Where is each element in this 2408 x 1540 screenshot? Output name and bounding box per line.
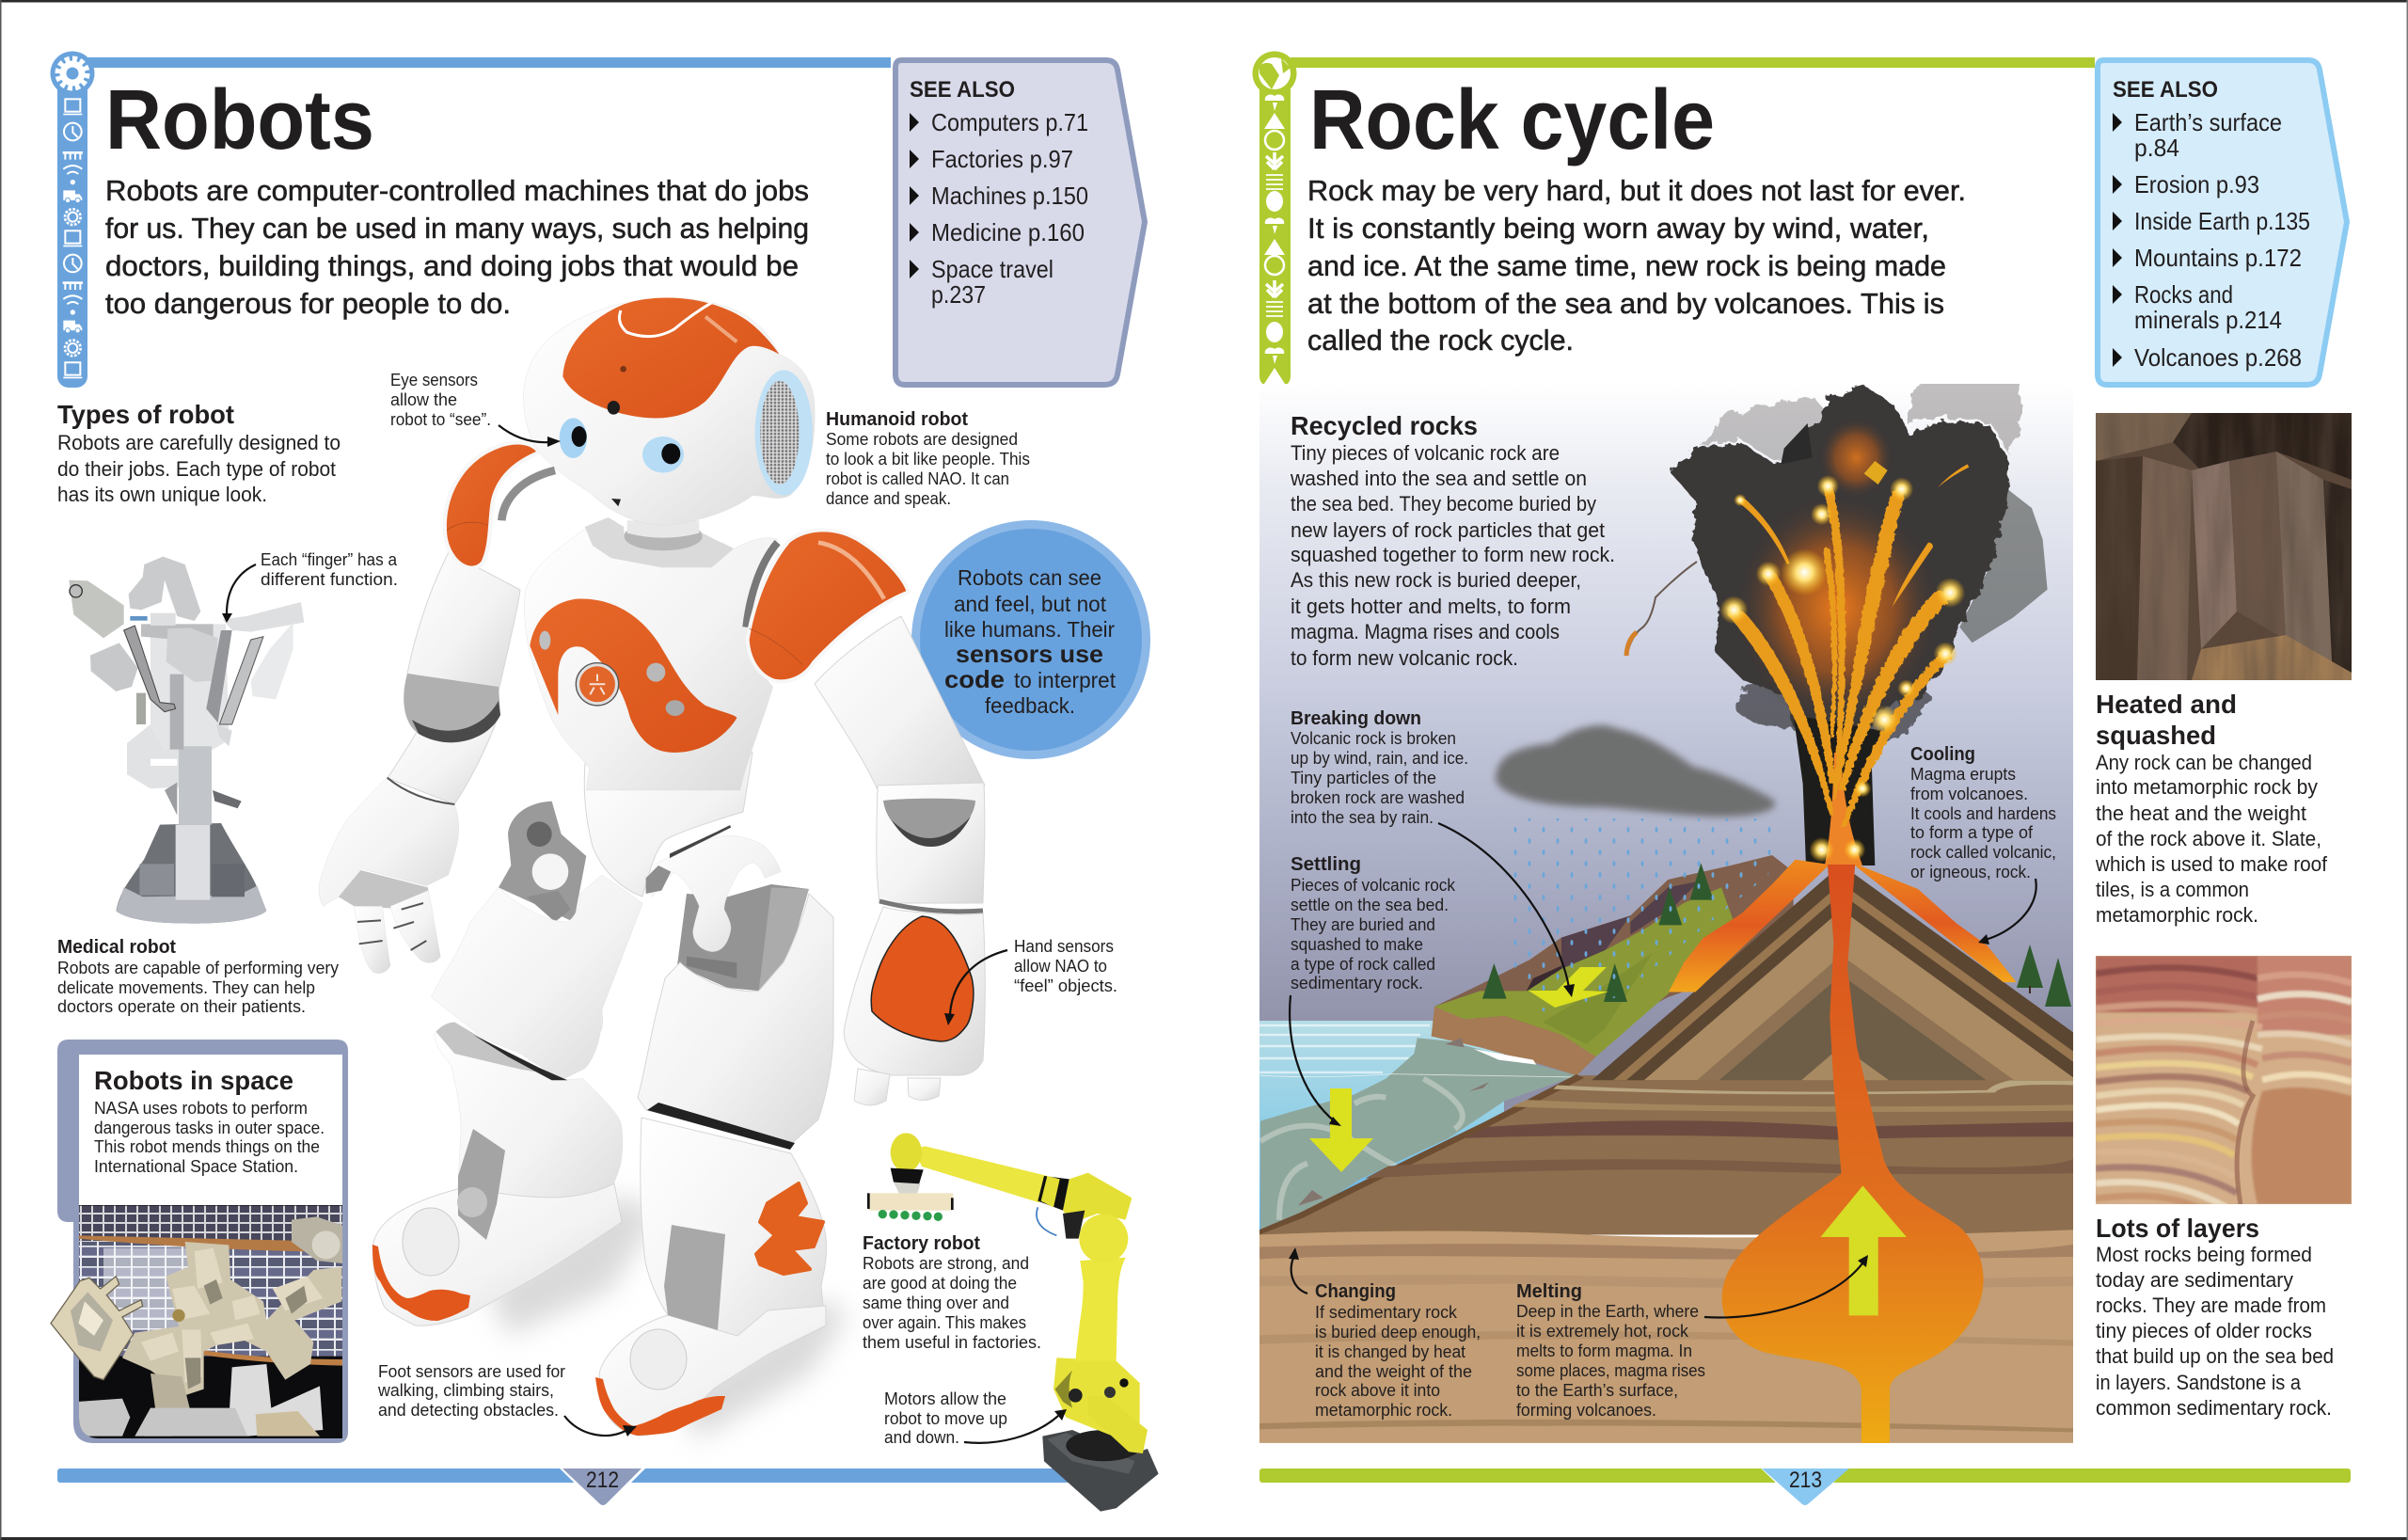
head — [524, 298, 815, 525]
right hip arch — [646, 835, 781, 952]
text: lots of layers: tiny pieces of older rocks — [2096, 1319, 2312, 1342]
text: recycled rocks — [1290, 411, 1615, 670]
text: melting: forming volcanoes. — [1516, 1400, 1656, 1420]
collar and neck — [585, 517, 734, 567]
text: recycled rocks: washed into the sea and settle on — [1290, 467, 1587, 490]
header bar — [1291, 57, 2095, 68]
arrow: finger — [222, 564, 256, 623]
text: recycled rocks: magma. Magma rises and cools — [1291, 620, 1560, 643]
icon sidebar — [1253, 51, 1296, 388]
sediment layers — [1259, 1075, 2073, 1234]
text: types of robot: Types of robot — [57, 400, 234, 429]
right thigh — [638, 894, 833, 1145]
panel: robots in space: dangerous tasks in outer space. — [94, 1118, 325, 1137]
floor shadow — [489, 1195, 847, 1439]
text: humanoid robot: Some robots are designed — [826, 429, 1018, 449]
text: lots of layers: that build up on the sea bed — [2096, 1344, 2334, 1368]
right shoulder — [746, 543, 778, 627]
arrow: hand sensors — [944, 950, 1007, 1025]
text: recycled rocks: it gets hotter and melts, to form — [1291, 595, 1571, 618]
text: factory robot: same thing over and — [863, 1293, 1009, 1312]
arrow: settling down yellow — [1309, 1088, 1373, 1172]
label: each finger — [261, 549, 398, 589]
panel: see also: Medicine p.160 — [931, 218, 1085, 246]
text: settling: Settling — [1291, 854, 1361, 875]
text: lots of layers: common sedimentary rock. — [2096, 1396, 2332, 1420]
text: lots of layers: rocks. They are made from — [2096, 1294, 2326, 1317]
panel: see also: minerals p.214 — [2134, 306, 2282, 334]
title: Rock cycle — [1309, 73, 1715, 167]
panel: robots in space: This robot mends things on the — [94, 1136, 320, 1156]
panel: see also: Inside Earth p.135 — [2134, 207, 2310, 235]
intro text: too dangerous for people to do. — [105, 287, 511, 320]
arrow: eye sensors — [499, 425, 561, 447]
label: motors — [884, 1389, 1007, 1447]
text: heated and squashed: into metamorphic rock by — [2096, 775, 2319, 799]
intro text: doctors, building things, and doing jobs that would be — [105, 249, 799, 282]
intro text — [1307, 174, 1966, 357]
robot left arm — [319, 552, 520, 974]
callout: robots can see and feel: sensors use — [956, 640, 1103, 668]
text: breaking down: Tiny particles of the — [1291, 768, 1436, 787]
text: recycled rocks: new layers of rock particles that get — [1291, 518, 1606, 542]
text: heated and squashed: Heated and — [2096, 690, 2237, 719]
text: factory robot: Factory robot — [863, 1233, 980, 1254]
label: eye sensors: allow the — [390, 389, 457, 409]
right lower leg — [641, 1103, 826, 1370]
text: types of robot: has its own unique look. — [57, 483, 267, 506]
panel: see also: Volcanoes p.268 — [2134, 343, 2302, 372]
page 212: Robots — [51, 51, 1159, 1512]
robot legs — [431, 802, 809, 1242]
text: recycled rocks: squashed together to form new rock. — [1291, 543, 1615, 566]
label: motors: and down. — [884, 1427, 959, 1447]
text: recycled rocks: Recycled rocks — [1291, 411, 1478, 440]
text: heated and squashed: which is used to make roof — [2095, 852, 2328, 876]
text: humanoid robot: Humanoid robot — [826, 409, 968, 430]
chest panel — [530, 599, 737, 753]
text: settling: squashed to make — [1291, 934, 1423, 954]
text: settling: settle on the sea bed. — [1291, 895, 1449, 914]
text: factory robot: over again. This makes — [863, 1312, 1026, 1332]
label: eye sensors — [390, 370, 491, 429]
footer bar with page number — [57, 1463, 1092, 1511]
text: settling: Pieces of volcanic rock — [1291, 875, 1456, 895]
text: humanoid robot — [826, 409, 1030, 508]
text: cooling: to form a type of — [1910, 822, 2034, 842]
text: changing: and the weight of the — [1315, 1361, 1472, 1381]
callout: robots can see and feel: Robots can see — [958, 565, 1101, 590]
ear speaker — [755, 370, 813, 496]
intro text: Robots are computer-controlled machines that do jobs — [105, 174, 809, 207]
panel: robots in space: NASA uses robots to perform — [94, 1098, 308, 1118]
text: factory robot: Robots are strong, and — [863, 1253, 1029, 1273]
label: each finger: Each “finger” has a — [261, 549, 398, 569]
text: changing: rock above it into — [1315, 1380, 1440, 1400]
text: medical robot — [57, 937, 340, 1016]
text: breaking down: into the sea by rain. — [1291, 807, 1434, 827]
trees on hill — [1482, 863, 1714, 1002]
text: breaking down: Volcanic rock is broken — [1291, 728, 1456, 748]
text: medical robot: doctors operate on their patients. — [57, 996, 306, 1016]
text: humanoid robot: to look a bit like people. This — [826, 449, 1030, 468]
medical robot photo — [69, 557, 304, 924]
text: breaking down: broken rock are washed — [1291, 787, 1465, 807]
right ankle — [664, 1225, 725, 1330]
arrow: slanted yellow — [1529, 967, 1608, 1008]
intro text: Rock may be very hard, but it does not last for ever. — [1307, 174, 1966, 207]
text: humanoid robot: dance and speak. — [826, 488, 951, 508]
label: foot sensors — [377, 1361, 565, 1420]
text: cooling: It cools and hardens — [1910, 803, 2056, 823]
text: medical robot: Medical robot — [57, 937, 176, 958]
callout: robots can see and feel: to interpret — [1014, 668, 1117, 692]
text: heated and squashed: metamorphic rock. — [2096, 903, 2258, 927]
pelvis — [584, 753, 752, 897]
panel: see also: Rocks and — [2134, 280, 2233, 309]
lava flows — [1669, 860, 1830, 992]
page 213: Rock cycle — [1253, 51, 2352, 1511]
panel: see also: Erosion p.93 — [2134, 170, 2259, 198]
panel: see also: Space travel — [931, 255, 1054, 283]
panel: see also: Mountains p.172 — [2134, 244, 2302, 272]
rain — [1505, 818, 1778, 1011]
panel: see also — [895, 60, 1145, 385]
text: lots of layers: in layers. Sandstone is a — [2096, 1371, 2301, 1394]
text: breaking down: up by wind, rain, and ice. — [1291, 748, 1468, 768]
text: changing — [1315, 1281, 1481, 1420]
text: breaking down: Breaking down — [1291, 708, 1421, 729]
panel: see also — [2098, 60, 2347, 385]
text: factory robot: are good at doing the — [863, 1273, 1017, 1293]
text: settling: They are buried and — [1291, 914, 1435, 934]
arrow: foot sensors — [564, 1416, 637, 1437]
left foot — [372, 1129, 622, 1326]
intro text — [105, 174, 809, 320]
text: melting: melts to form magma. In — [1516, 1341, 1692, 1360]
sand layers — [1259, 1230, 2073, 1443]
robot right arm — [815, 616, 985, 1105]
left shoulder — [501, 470, 555, 520]
left lower leg — [435, 1023, 623, 1242]
humanoid robot NAO — [319, 298, 985, 1439]
panel: robots in space: International Space Station. — [94, 1156, 298, 1176]
label: eye sensors: robot to “see”. — [390, 409, 491, 429]
label: motors: robot to move up — [884, 1408, 1007, 1428]
label: eye sensors: Eye sensors — [390, 370, 478, 389]
text: melting: some places, magma rises — [1516, 1360, 1705, 1380]
panel: see also: p.237 — [931, 280, 986, 309]
text: cooling: rock called volcanic, — [1910, 842, 2056, 862]
text: recycled rocks: Tiny pieces of volcanic rock are — [1291, 441, 1560, 465]
text: lots of layers — [2096, 1214, 2334, 1420]
rock cycle illustration — [1259, 376, 2139, 1443]
text: changing: metamorphic rock. — [1315, 1400, 1452, 1420]
text: types of robot: do their jobs. Each type of robot — [57, 457, 337, 481]
text: cooling: or igneous, rock. — [1910, 862, 2031, 881]
title: Robots — [105, 73, 374, 167]
text: settling: a type of rock called — [1291, 954, 1435, 974]
text: types of robot: Robots are carefully designed to — [57, 431, 341, 454]
arrow: settling — [1290, 995, 1341, 1126]
text: melting: it is extremely hot, rock — [1516, 1321, 1689, 1341]
text: recycled rocks: to form new volcanic rock. — [1291, 646, 1518, 670]
photo: slate rock — [2096, 413, 2352, 680]
text: types of robot — [57, 400, 341, 506]
footer bar with page number: 212 — [586, 1468, 619, 1493]
panel: robots in space — [51, 1040, 348, 1443]
space station photo — [51, 1205, 345, 1438]
label: foot sensors: and detecting obstacles. — [378, 1400, 559, 1420]
volcano cone — [1592, 874, 2073, 1080]
factory robot photo — [867, 1133, 1159, 1512]
callout: robots can see and feel: feedback. — [985, 693, 1075, 718]
arrow: melting — [1704, 1255, 1868, 1317]
panel: see also: Factories p.97 — [931, 145, 1073, 173]
intro text: It is constantly being worn away by wind, water, — [1307, 212, 1929, 245]
arrow: motors — [964, 1409, 1067, 1443]
text: factory robot: them useful in factories. — [863, 1332, 1041, 1352]
text: changing: is buried deep enough, — [1315, 1322, 1481, 1342]
coast, hill and cliff — [1434, 855, 1794, 1047]
panel: see also: SEE ALSO — [910, 77, 1015, 103]
text: medical robot: Robots are capable of performing very — [57, 958, 340, 977]
icon sidebar — [51, 51, 94, 388]
text: breaking down — [1291, 708, 1468, 827]
text: factory robot — [863, 1233, 1041, 1352]
intro text: called the rock cycle. — [1307, 324, 1574, 357]
header bar — [87, 57, 891, 68]
text: cooling: Cooling — [1910, 744, 1975, 765]
text: changing: Changing — [1315, 1281, 1396, 1302]
text: changing: it is changed by heat — [1315, 1342, 1465, 1361]
sea bed — [1260, 1038, 1577, 1230]
text: melting: Melting — [1516, 1281, 1582, 1302]
label: foot sensors: walking, climbing stairs, — [377, 1380, 554, 1400]
ash plume — [1671, 376, 2048, 865]
arrow: changing — [1289, 1247, 1307, 1294]
right hip joint — [677, 884, 809, 991]
label: hand sensors — [1014, 936, 1117, 995]
label: hand sensors: allow NAO to — [1014, 956, 1107, 976]
panel: robots in space: Robots in space — [94, 1066, 293, 1095]
sea — [1259, 1021, 1504, 1230]
callout: robots can see and feel — [911, 520, 1150, 759]
trees near cone — [2017, 945, 2071, 1007]
photo: sandstone layers — [2096, 956, 2352, 1209]
arrow: cooling — [1978, 879, 2036, 945]
text: recycled rocks: the sea bed. They become buried by — [1291, 492, 1597, 516]
callout: robots can see and feel: like humans. Their — [944, 617, 1115, 642]
callout: robots can see and feel: code — [944, 665, 1005, 693]
text: settling: sedimentary rock. — [1291, 973, 1423, 992]
text: heated and squashed: Any rock can be changed — [2096, 751, 2312, 774]
left ankle — [458, 1129, 505, 1240]
head orange panel — [562, 298, 779, 419]
intro text: at the bottom of the sea and by volcanoes. This is — [1307, 287, 1944, 320]
text: melting: Deep in the Earth, where — [1516, 1301, 1699, 1321]
text: melting — [1516, 1281, 1705, 1420]
text: heated and squashed: squashed — [2096, 721, 2216, 750]
text: recycled rocks: As this new rock is buried deeper, — [1291, 568, 1581, 592]
left thigh — [431, 875, 642, 1080]
text: melting: to the Earth’s surface, — [1516, 1380, 1678, 1400]
text: cooling — [1910, 744, 2056, 881]
panel: see also: p.84 — [2134, 134, 2179, 162]
label: each finger: different function. — [261, 569, 398, 589]
arrow: magma rising — [1820, 1185, 1907, 1315]
sky — [1259, 384, 2073, 1112]
panel: see also: Machines p.150 — [931, 182, 1088, 210]
panel: see also: Computers p.71 — [931, 108, 1088, 136]
text: heated and squashed: of the rock above it. Slate, — [2096, 827, 2321, 850]
callout: robots can see and feel: and feel, but not — [954, 592, 1107, 616]
right foot — [595, 1225, 826, 1436]
footer bar with page number: 213 — [1789, 1468, 1822, 1493]
label: motors: Motors allow the — [884, 1389, 1006, 1408]
panel: see also: Earth’s surface — [2134, 108, 2282, 136]
magma chamber and vent — [1722, 865, 1984, 1443]
text: heated and squashed — [2095, 690, 2328, 927]
text: cooling: Magma erupts — [1910, 764, 2016, 784]
left hip joint — [499, 802, 586, 922]
panel: see also: SEE ALSO — [2113, 77, 2218, 103]
text: humanoid robot: robot is called NAO. It can — [826, 468, 1009, 488]
torso — [525, 530, 778, 790]
text: lots of layers: today are sedimentary — [2096, 1268, 2294, 1292]
intro text: and ice. At the same time, new rock is being made — [1307, 249, 1946, 282]
text: settling — [1291, 854, 1456, 992]
text: heated and squashed: tiles, is a common — [2096, 878, 2249, 901]
text: changing: If sedimentary rock — [1315, 1302, 1458, 1322]
text: lots of layers: Lots of layers — [2096, 1214, 2259, 1243]
label: hand sensors: Hand sensors — [1014, 936, 1114, 956]
label: hand sensors: “feel” objects. — [1014, 976, 1117, 995]
volcanic bomb — [1626, 562, 1697, 656]
arrow: breaking down — [1438, 823, 1575, 997]
intro text: for us. They can be used in many ways, such as helping — [105, 212, 809, 245]
rain cloud — [1496, 725, 1775, 817]
label: foot sensors: Foot sensors are used for — [378, 1361, 565, 1381]
text: lots of layers: Most rocks being formed — [2096, 1243, 2312, 1266]
text: medical robot: delicate movements. They can help — [57, 977, 315, 997]
text: cooling: from volcanoes. — [1910, 784, 2028, 803]
footer bar with page number — [1259, 1463, 2351, 1511]
text: heated and squashed: the heat and the weight — [2096, 802, 2307, 825]
eyes — [560, 418, 587, 458]
